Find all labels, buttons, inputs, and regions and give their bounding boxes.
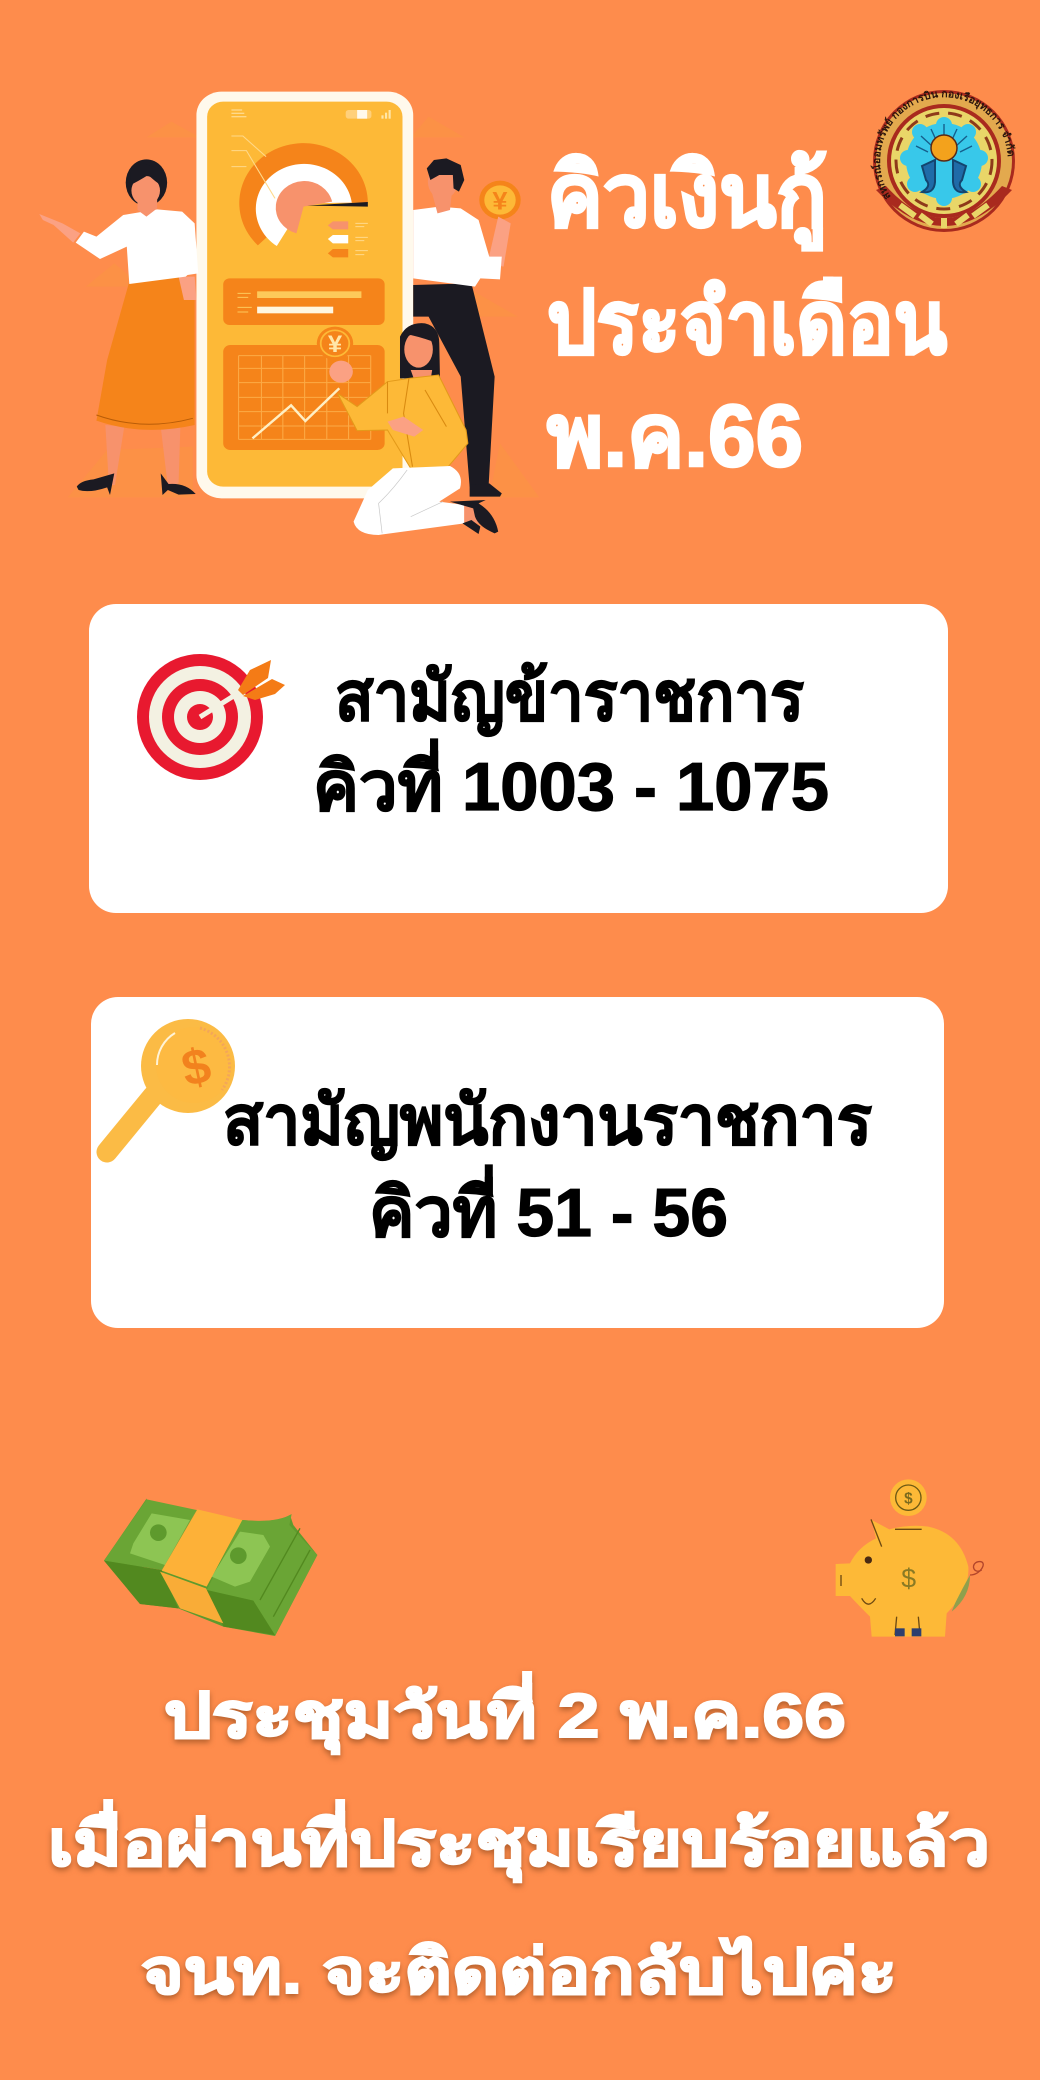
- footer message: จนท. จะติดต่อกลับไปค่ะ: [141, 1936, 897, 2007]
- icon: stack of banknotes: [104, 1498, 317, 1636]
- title: พ.ค.66: [547, 386, 803, 485]
- phone: [196, 92, 413, 498]
- gauge legend: [328, 221, 368, 257]
- heading: civil servants: สามัญข้าราชการ: [335, 659, 804, 737]
- coin: yen: ¥: [328, 331, 342, 358]
- woman seated: [329, 323, 498, 535]
- heading: government employees: สามัญพนักงานราชการ: [223, 1083, 872, 1161]
- background mounds: [68, 117, 539, 497]
- coin: yen: [317, 327, 353, 360]
- icon: magnifier with dollar coin: [107, 1019, 235, 1152]
- icon: magnifier with dollar coin: $: [177, 1037, 216, 1097]
- icon: piggy bank with coin: $: [904, 1490, 913, 1507]
- icon: piggy bank with coin: [836, 1479, 983, 1637]
- status bar: [231, 109, 391, 119]
- gauge chart: [231, 136, 368, 246]
- icon: piggy bank with coin: $: [901, 1563, 916, 1593]
- queue numbers 1003 - 1075: คิวที่ 1003 - 1075: [313, 738, 829, 825]
- illustration: phone with three people: [39, 92, 539, 535]
- title: ประจำเดือน: [547, 273, 947, 372]
- man standing: [413, 158, 521, 497]
- queue numbers 51 - 56: คิวที่ 51 - 56: [369, 1164, 728, 1251]
- line chart panel: [223, 345, 385, 450]
- footer message: ประชุมวันที่ 2 พ.ค.66: [164, 1672, 846, 1754]
- title: [547, 146, 947, 485]
- panel: government employees queue: [91, 997, 944, 1328]
- panel: civil servants queue: [89, 604, 948, 913]
- man standing: ¥: [492, 186, 508, 215]
- title: คิวเงินกู้: [547, 146, 827, 251]
- footer message: [48, 1672, 990, 2007]
- footer message: เมื่อผ่านที่ประชุมเรียบร้อยแล้ว: [48, 1800, 990, 1882]
- icon: target with arrow: [137, 654, 285, 780]
- data panel: [223, 278, 385, 325]
- woman standing: [39, 159, 198, 495]
- logo: cooperative seal: สหกรณ์ออมทรัพย์ กองการบิน กองเรือยุทธการ จำกัด: [870, 90, 1016, 200]
